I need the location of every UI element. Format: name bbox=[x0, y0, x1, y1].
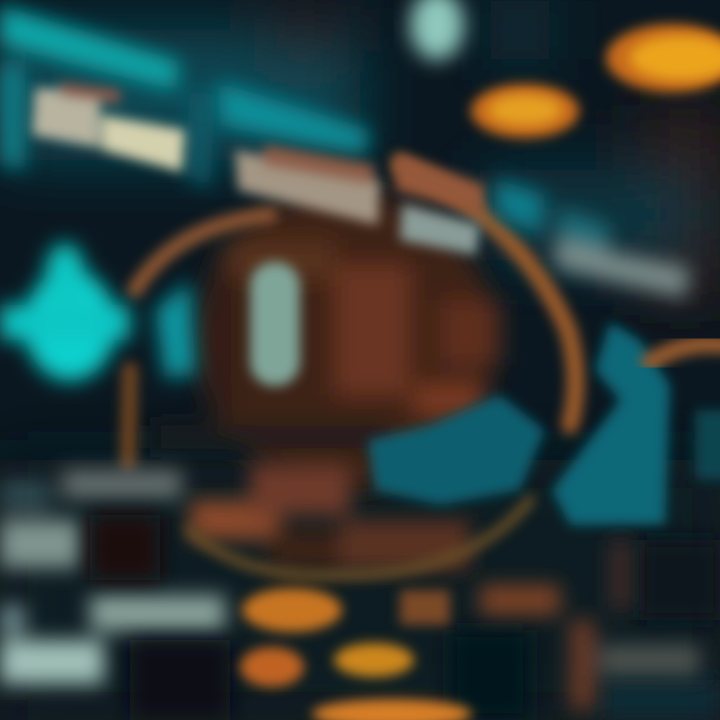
panel: middle teal sign bbox=[218, 82, 370, 155]
icon: top pale teal lamp bbox=[410, 0, 464, 60]
middle beige block bbox=[235, 145, 380, 225]
chart: teal blue hill shape bbox=[368, 395, 545, 505]
lower brown patches of the circle bbox=[190, 465, 470, 570]
top-left pale blocks bbox=[32, 82, 185, 172]
dark blocks lower area bbox=[90, 515, 720, 720]
bottom-left grey blocks bbox=[0, 470, 225, 684]
arrow: orange line right bbox=[650, 344, 720, 362]
right orange and grey blocks bbox=[395, 152, 485, 255]
icon: orange bottom lights bbox=[240, 588, 472, 720]
panel: brown central circle bbox=[150, 190, 500, 490]
chart: teal triangle shape bbox=[552, 322, 720, 525]
icon: cyan heart-like shape bbox=[0, 243, 195, 381]
icon: yellow lamp centre bbox=[471, 84, 579, 138]
lower right muted blocks bbox=[480, 540, 700, 710]
icon: yellow lamp right bbox=[606, 24, 720, 92]
icon: pale vertical pill bbox=[250, 262, 300, 386]
far right teal and grey sign bbox=[495, 178, 690, 298]
circle ring outline bbox=[128, 165, 576, 575]
panel: top-left teal sign bbox=[0, 5, 215, 190]
